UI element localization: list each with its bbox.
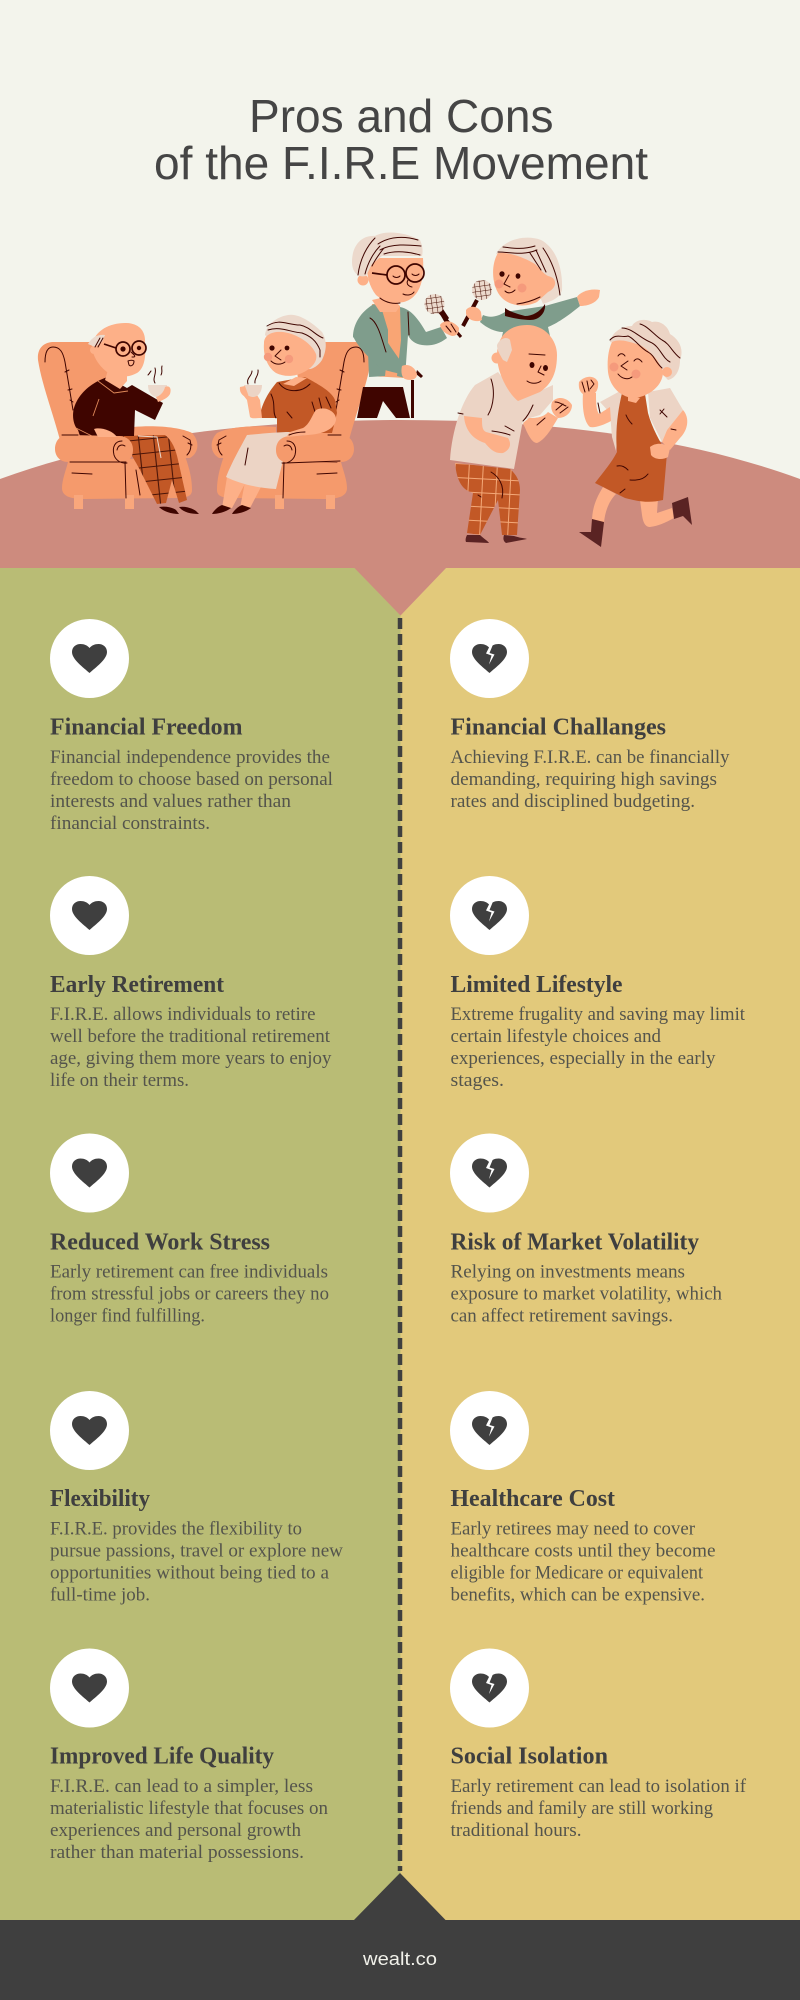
body text: Early retirees may need to cover [450,1518,696,1540]
cardigan and arm [600,390,622,451]
body text [50,1518,343,1606]
body text: experiences, especially in the early [450,1048,716,1069]
body text: Early retirement can lead to isolation if [450,1776,747,1797]
body text: eligible for Medicare or equivalent [450,1562,704,1584]
hand and cane [411,380,414,418]
footer [0,1920,800,2000]
icon: heart [50,1134,129,1212]
hand [94,428,117,437]
legs [222,477,262,508]
microphone [424,294,461,337]
body text: longer find fulfilling. [50,1306,205,1326]
right arm [523,412,558,443]
body text: benefits, which can be expensive. [450,1584,705,1606]
body text: well before the traditional retirement [50,1026,331,1047]
item: Limited Lifestyle [450,876,746,1091]
item: Financial Freedom [50,619,333,834]
body text: F.I.R.E. allows individuals to retire [50,1004,316,1025]
title: Pros and Cons [249,90,554,142]
body text: demanding, requiring high savings [450,769,717,790]
hand right [577,289,600,306]
hair [352,233,423,276]
heading: Healthcare Cost [450,1486,615,1512]
man singing with microphone and cane [352,233,461,418]
head [372,296,400,312]
dashed divider [398,618,402,1871]
hair [265,315,326,369]
heading: Financial Challanges [450,714,666,740]
body text: from stressful jobs or careers they no [50,1284,329,1304]
near armrest [276,435,354,463]
boots [579,519,604,547]
hill [0,420,800,570]
notch arrow: top [354,567,447,616]
cardigan right and arm [397,307,447,378]
body text: opportunities without being tied to a [50,1562,330,1584]
shirt [73,377,163,436]
skirt [226,432,290,489]
body text: F.I.R.E. provides the flexibility to [50,1518,302,1540]
heading: Social Isolation [450,1744,608,1770]
heading: Early Retirement [50,972,224,998]
shirt [450,372,553,469]
arms [286,408,336,437]
body text: friends and family are still working [450,1798,713,1819]
body text: life on their terms. [50,1070,189,1091]
heading: Improved Life Quality [50,1744,274,1770]
panel: cons background [400,568,800,1920]
cup and steam [244,385,262,397]
icon: heart [50,619,129,698]
armchair: left [38,342,197,509]
sleeve [353,316,403,374]
heading: Financial Freedom [50,714,242,740]
head [497,325,557,401]
body text: Early retirement can free individuals [50,1262,328,1282]
footer: wealt.co [362,1949,437,1969]
body text: rather than material possessions. [50,1842,304,1863]
body text: materialistic lifestyle that focuses on [50,1798,328,1819]
hair back [496,238,562,304]
body text: can affect retirement savings. [450,1306,673,1326]
title [154,90,648,189]
body text: interests and values rather than [50,791,292,812]
body text: full-time job. [50,1584,150,1606]
icon: broken heart [450,876,529,955]
icon: heart [50,1648,129,1728]
blouse [259,377,337,433]
illustration: elderly people [38,233,692,547]
hair [88,335,105,347]
body text: exposure to market volatility, which [450,1284,722,1304]
microphone [463,280,492,326]
body text: Achieving F.I.R.E. can be financially [450,747,730,768]
arm left [583,393,611,427]
title: of the F.I.R.E Movement [154,137,648,189]
body text: age, giving them more years to enjoy [50,1048,332,1069]
heading: Flexibility [50,1486,150,1512]
legs [592,487,616,523]
panel: pros background [0,568,400,1920]
body text [50,1262,329,1326]
shoes [212,505,251,514]
body text: stages. [450,1070,504,1091]
collar [505,304,545,320]
body text: Extreme frugality and saving may limit [450,1004,746,1025]
body text: F.I.R.E. can lead to a simpler, less [50,1776,313,1797]
shoes [466,535,527,543]
left arm [464,416,510,453]
body text: financial constraints. [50,813,210,834]
body text [450,1518,716,1606]
leg line [136,470,140,495]
body text [50,747,333,834]
item: Risk of Market Volatility [450,1134,722,1326]
cup and steam [148,385,167,397]
body text [450,747,730,812]
head [283,377,307,386]
body text [50,1776,328,1863]
body text: experiences and personal growth [50,1820,301,1841]
head [105,370,127,389]
glasses [372,264,424,284]
arm right [662,410,687,450]
item: Improved Life Quality [50,1648,328,1863]
body text: freedom to choose based on personal [50,769,333,790]
dress [595,393,667,502]
heading: Risk of Market Volatility [450,1230,699,1256]
item: Healthcare Cost [450,1391,716,1606]
head [493,253,555,305]
footer arrow [353,1873,446,1921]
woman dancing [579,320,692,547]
body text: healthcare costs until they become [450,1540,716,1562]
icon: broken heart [450,619,529,698]
glasses [104,341,146,356]
heading: Limited Lifestyle [450,972,623,998]
body text [50,1004,332,1091]
man sitting with cup [55,323,199,514]
near armrest [55,435,133,463]
armchair: right [212,342,371,509]
icon: broken heart [450,1391,529,1470]
head [628,396,640,403]
woman sitting with cup [212,315,354,514]
pants [455,463,520,535]
cardigan left [353,304,388,377]
icon: broken heart [450,1648,529,1728]
icon: broken heart [450,1134,529,1212]
item: Financial Challanges [450,619,730,812]
body text: Relying on investments means [450,1262,685,1282]
body text: Financial independence provides the [50,747,330,768]
icon: heart [50,1391,129,1470]
item: Social Isolation [450,1648,747,1841]
heading: Reduced Work Stress [50,1230,270,1256]
body text: certain lifestyle choices and [450,1026,661,1047]
body text [450,1262,722,1326]
body and arms [480,297,580,345]
pants [120,435,187,504]
hair [610,320,682,380]
icon: heart [50,876,129,955]
item: Flexibility [50,1391,343,1606]
man dancing [450,325,572,543]
shoes [159,507,199,514]
body text [450,1776,747,1841]
item: Early Retirement [50,876,332,1091]
item: Reduced Work Stress [50,1134,329,1326]
woman singing with microphone [463,238,600,345]
body text [450,1004,746,1091]
body text: pursue passions, travel or explore new [50,1540,343,1562]
inner shirt [369,304,405,378]
body text: rates and disciplined budgeting. [450,791,695,812]
pants [357,387,410,418]
body text: traditional hours. [450,1820,582,1841]
